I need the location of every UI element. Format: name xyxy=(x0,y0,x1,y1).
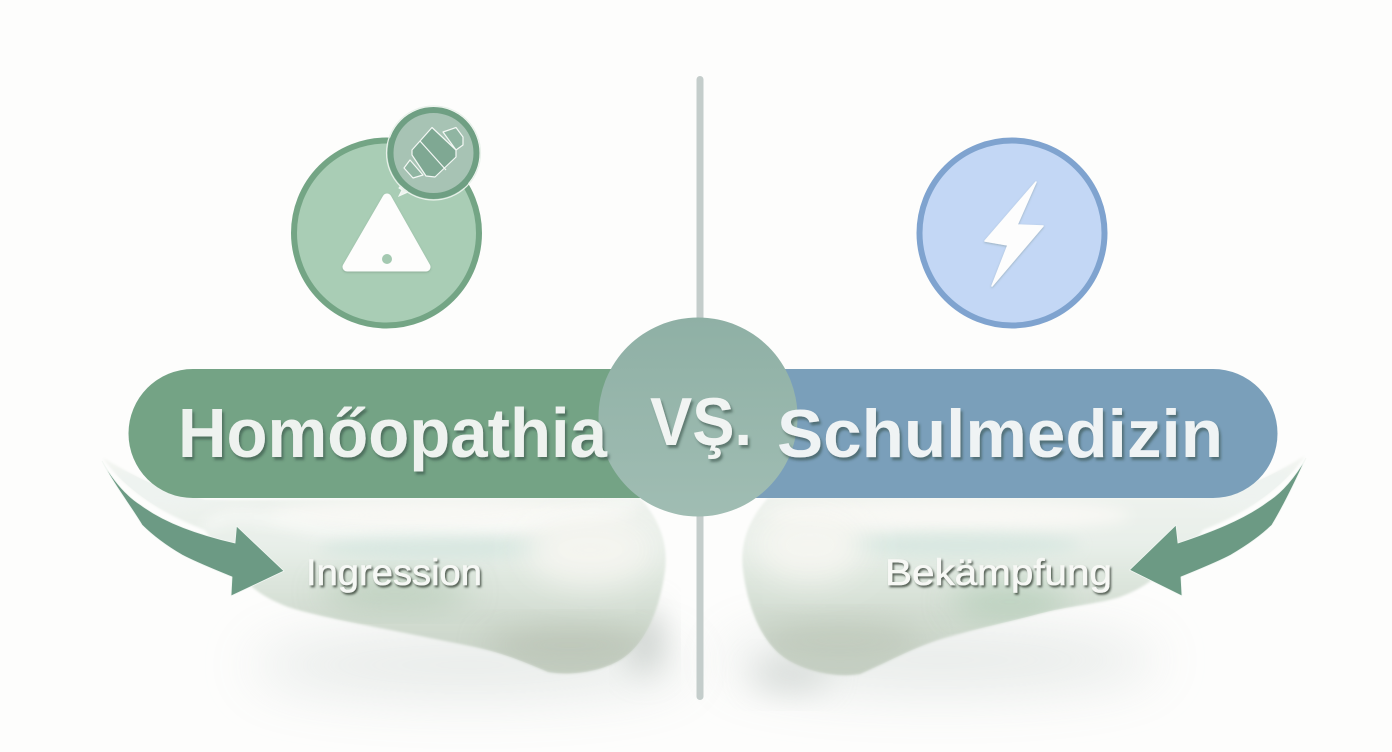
icon: green warning circle xyxy=(294,106,480,326)
icon: white triangle xyxy=(347,198,426,267)
center VS circle xyxy=(598,318,798,516)
icon: lightning bolt xyxy=(985,182,1043,286)
arrow: right, pointing left xyxy=(1130,458,1306,596)
soft shadows under hands xyxy=(250,606,1160,697)
right hand illustration xyxy=(742,456,1320,675)
heading: Schulmedizin: Schulmedizin xyxy=(777,396,1223,472)
right pill banner xyxy=(750,369,1278,498)
heading: VS: VŞ. xyxy=(650,384,752,460)
left pill banner xyxy=(128,369,650,498)
heading: Homöopathia: Homőopathia xyxy=(178,394,608,472)
icon: pill bubble xyxy=(386,106,480,200)
label: Bekämpfung: Bekämpfung xyxy=(885,552,1112,593)
center divider line xyxy=(696,76,704,700)
arrow: left, pointing right xyxy=(102,461,284,596)
icon: blue lightning circle xyxy=(920,140,1104,326)
left hand illustration xyxy=(90,458,666,674)
label: Ingression: Ingression xyxy=(306,552,482,593)
